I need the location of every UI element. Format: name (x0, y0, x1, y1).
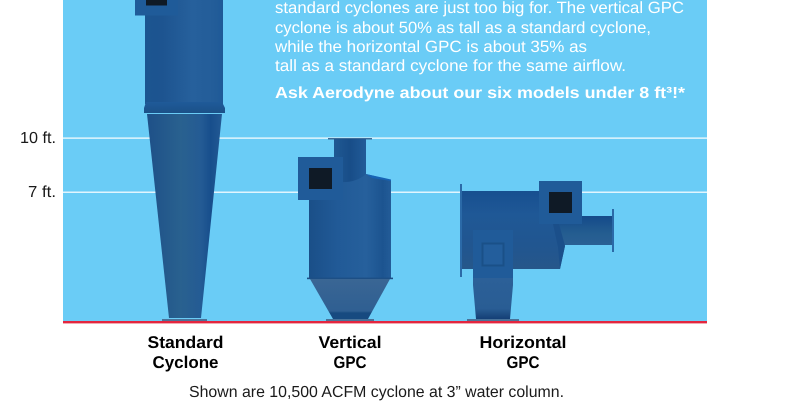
panel: blue background (63, 0, 707, 321)
body text (274, 0, 684, 75)
label: vertical GPC: GPC (334, 353, 366, 372)
body text: while the horizontal GPC is about 35% as (274, 38, 587, 56)
axis label: 10 ft: 10 ft. (20, 130, 56, 147)
horizontal GPC cyclone (460, 181, 614, 321)
footnote: Shown are 10,500 ACFM cyclone at 3” water column. (189, 384, 564, 401)
height gridline: 10 ft (63, 138, 707, 139)
label: standard cyclone: Cyclone (152, 353, 218, 372)
vertical GPC cyclone (298, 138, 393, 321)
label: vertical GPC (318, 333, 382, 372)
label: horizontal GPC: Horizontal (480, 333, 566, 352)
label: standard cyclone: Standard (148, 333, 224, 352)
label: standard cyclone (148, 333, 224, 372)
label: horizontal GPC (480, 333, 566, 372)
axis label: 7 ft: 7 ft. (28, 184, 56, 201)
label: vertical GPC: Vertical (318, 333, 382, 352)
body text: cyclone is about 50% as tall as a standard cyclone, (275, 19, 651, 37)
label: horizontal GPC: GPC (506, 353, 540, 372)
height gridline: 7 ft (63, 192, 707, 193)
callout: Ask Aerodyne about our six models under 8 ft³!* (275, 85, 686, 102)
body text: tall as a standard cyclone for the same airflow. (275, 57, 626, 75)
standard cyclone (135, 0, 225, 321)
ground line (63, 321, 707, 323)
